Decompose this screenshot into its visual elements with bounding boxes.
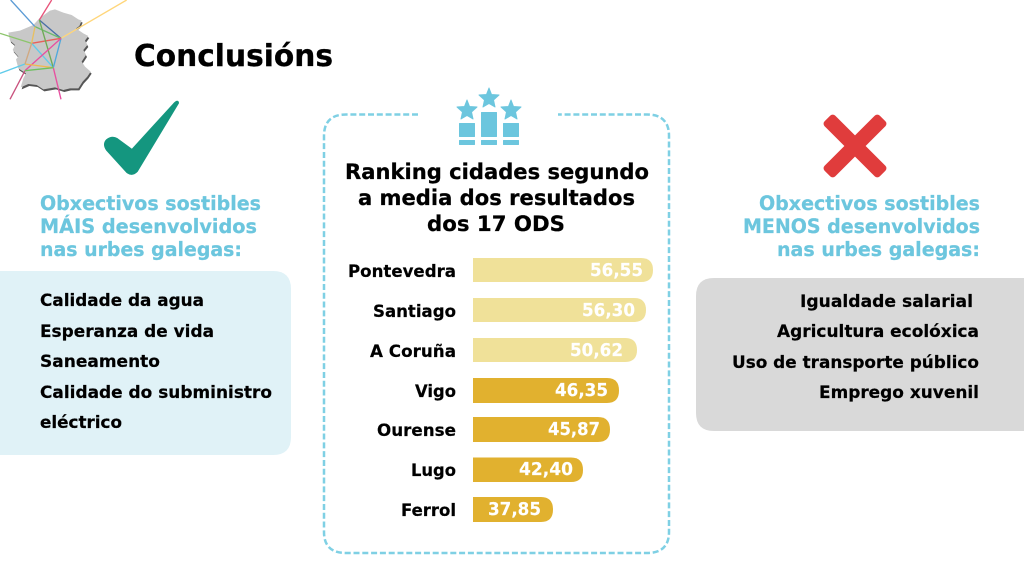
bar: Santiago: Santiago — [373, 302, 456, 321]
bar: Ourense: 45,87 — [548, 419, 600, 440]
icon: red cross — [822, 113, 888, 179]
bar: Pontevedra — [348, 258, 653, 282]
panel: most developed goals list: eléctrico — [40, 413, 122, 433]
heading: least developed goals: nas urbes galegas: — [777, 238, 980, 261]
bar: Lugo: 42,40 — [519, 459, 573, 480]
bar: Ourense — [377, 417, 610, 442]
bar: Vigo: Vigo — [415, 382, 456, 401]
bar: Ferrol — [401, 497, 553, 522]
heading: ranking title: dos 17 ODS — [427, 212, 565, 236]
bar: Ourense: Ourense — [377, 421, 456, 440]
panel: least developed goals list: Uso de transporte público — [732, 353, 979, 373]
panel: most developed goals list: Esperanza de vida — [40, 322, 214, 342]
bar: Vigo: 46,35 — [555, 380, 608, 401]
bar: Vigo — [415, 378, 619, 403]
panel: least developed goals list: Agricultura ecolóxica — [777, 322, 979, 342]
panel: most developed goals list: Calidade do subministro — [40, 383, 272, 403]
bar: Ferrol: 37,85 — [488, 499, 541, 520]
bar: A Coruña: 50,62 — [570, 340, 623, 361]
heading: ranking title: Ranking cidades segundo — [345, 160, 649, 184]
heading: ranking title: a media dos resultados — [358, 186, 635, 210]
bar: Lugo: Lugo — [411, 461, 456, 480]
icon: green check mark — [105, 102, 178, 174]
bar: A Coruña: A Coruña — [370, 342, 456, 361]
bar: Pontevedra: 56,55 — [590, 260, 643, 281]
heading: most developed goals: nas urbes galegas: — [40, 238, 242, 261]
title: Conclusións — [134, 39, 333, 74]
panel: most developed goals list: Saneamento — [40, 352, 160, 372]
panel: least developed goals list — [696, 278, 1024, 431]
heading: least developed goals — [743, 192, 980, 261]
heading: most developed goals — [40, 192, 261, 261]
heading: least developed goals: MENOS desenvolvidos — [743, 215, 980, 238]
bar chart: city ranking — [348, 258, 653, 522]
bar: Santiago — [373, 298, 646, 322]
panel: most developed goals list: Calidade da agua — [40, 291, 204, 311]
bar: A Coruña — [370, 338, 637, 362]
panel: most developed goals list — [0, 271, 291, 455]
panel: least developed goals list: Emprego xuvenil — [819, 383, 979, 403]
icon: Galicia map with network lines — [0, 0, 127, 99]
heading: ranking title — [345, 160, 649, 236]
heading: most developed goals: Obxectivos sostibles — [40, 192, 261, 215]
bar: Pontevedra: Pontevedra — [348, 262, 456, 281]
bar: Ferrol: Ferrol — [401, 501, 456, 520]
bar: Santiago: 56,30 — [582, 300, 635, 321]
heading: least developed goals: Obxectivos sostibles — [759, 192, 980, 215]
heading: most developed goals: MÁIS desenvolvidos — [40, 215, 257, 238]
panel: ranking dashed frame — [324, 114, 669, 553]
icon: podium with stars — [457, 88, 521, 144]
panel: least developed goals list: Igualdade salarial — [800, 292, 973, 312]
bar: Lugo — [411, 458, 583, 482]
